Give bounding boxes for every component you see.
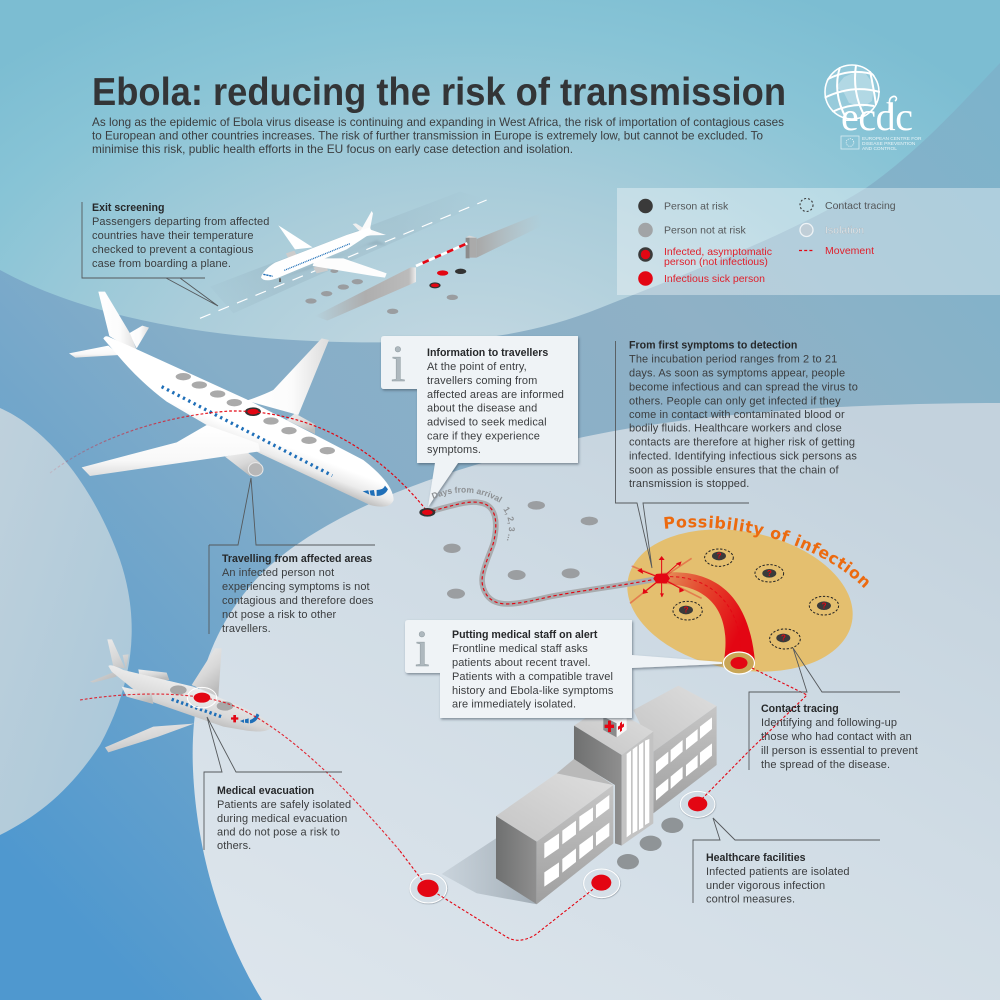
callout leader	[749, 648, 900, 770]
people at screening	[305, 269, 466, 314]
arrow: evacuation and ambulance path	[400, 851, 601, 940]
panel text: Putting medical staff on alert	[452, 629, 598, 641]
logo wordmark: ecdc	[841, 94, 913, 139]
contacts under tracing: ?	[717, 552, 722, 561]
seats	[176, 373, 335, 454]
callout: exit screening	[82, 202, 269, 306]
callout text: contagious and therefore does	[222, 595, 374, 607]
legend: isolation	[800, 224, 864, 236]
right wing	[633, 686, 717, 813]
central tower	[574, 705, 653, 846]
callout: contact tracing	[749, 648, 918, 771]
left wing	[496, 759, 613, 904]
panel text: travellers coming from	[427, 375, 537, 387]
panel text: symptoms.	[427, 444, 481, 456]
callout text: Medical evacuation	[217, 785, 314, 797]
callout leader	[616, 341, 749, 568]
legend: isolation: Isolation	[825, 224, 864, 236]
marker: isolated patient at zone	[724, 652, 754, 674]
scene: infection path	[419, 501, 839, 662]
legend: movement	[799, 245, 874, 257]
panel text: patients about recent travel.	[452, 657, 591, 669]
callout text	[217, 785, 351, 852]
people queue	[617, 818, 683, 869]
panel text: affected areas are informed	[427, 389, 564, 401]
callout text: soon as possible ensures that the chain of	[629, 464, 840, 476]
people not at risk	[443, 501, 598, 599]
evac lower engine	[122, 687, 153, 704]
callout text: Travelling from affected areas	[222, 553, 372, 565]
legend: infected asymptomatic: Infected, asymptomatic	[664, 246, 772, 258]
runway	[200, 192, 490, 318]
icon: globe	[824, 65, 880, 119]
callout text: others. People can only get infected if they	[629, 396, 841, 408]
airplane: medical evacuation	[90, 639, 272, 752]
callout text	[629, 340, 858, 490]
red infection tube	[657, 572, 755, 662]
panel: putting medical staff on alert	[405, 620, 722, 718]
callout leader	[204, 717, 342, 850]
evac details	[170, 685, 259, 723]
evac lower wing	[105, 718, 208, 752]
legend: infected asymptomatic: person (not infectious)	[664, 256, 768, 268]
contacts under tracing: ?	[684, 606, 689, 615]
callout leader	[693, 818, 880, 903]
label: days from arrival	[432, 486, 515, 540]
callout text	[92, 202, 269, 270]
callout text: The incubation period ranges from 2 to 21	[629, 354, 837, 366]
callout text: Exit screening	[92, 202, 164, 214]
panel text: about the disease and	[427, 402, 537, 414]
callout text: during medical evacuation	[217, 813, 347, 825]
callout text: contacts are therefore at higher risk of getting	[629, 436, 855, 448]
legend: movement: Movement	[825, 245, 874, 257]
legend: contact tracing: Contact tracing	[825, 200, 896, 212]
arrow: contact movement path	[697, 668, 807, 804]
legend: person at risk	[638, 199, 729, 213]
contacts under tracing	[673, 549, 839, 649]
callout text: and do not pose a risk to	[217, 826, 340, 838]
legend: person not at risk: Person not at risk	[664, 224, 746, 236]
hospital shadow	[442, 838, 537, 904]
logo caption: AND CONTROL	[862, 146, 897, 152]
red cross cube	[603, 709, 627, 737]
callout text: ill person is essential to prevent	[761, 745, 918, 757]
logo flag	[841, 136, 859, 149]
callout text: Healthcare facilities	[706, 852, 806, 864]
callout text: bodily fluids. Healthcare workers and close	[629, 422, 842, 434]
panel text: Patients with a compatible travel	[452, 671, 613, 683]
arrival marker	[419, 508, 435, 517]
evac fuselage	[108, 665, 272, 731]
callout text: From first symptoms to detection	[629, 340, 797, 352]
icon: info: i	[415, 621, 429, 678]
panel text: advised to seek medical	[427, 416, 547, 428]
callout text: Contact tracing	[761, 703, 839, 715]
intro text	[92, 115, 784, 156]
callout text: become infectious and can spread the virus to	[629, 382, 858, 394]
legend: person at risk: Person at risk	[664, 200, 729, 212]
circle: possibility of infection zone	[615, 511, 865, 690]
cockpit	[363, 486, 388, 496]
callout text: Passengers departing from affected	[92, 216, 269, 228]
window row	[162, 387, 332, 476]
airplane: large	[69, 292, 394, 507]
callout text	[222, 553, 374, 635]
callout text: travellers.	[222, 623, 271, 635]
title: Ebola: reducing the risk of transmission	[92, 71, 786, 114]
callout text: those who had contact with an	[761, 731, 912, 743]
callout text: Identifying and following-up	[761, 717, 897, 729]
evac upper wing	[192, 648, 222, 697]
panel: from first symptoms to detection	[616, 340, 858, 568]
arrow: medical evacuation flight path	[80, 694, 400, 851]
logo caption: EUROPEAN CENTRE FOR	[862, 136, 922, 142]
callout text: come in contact with contaminated blood or	[629, 409, 845, 421]
callout text: Patients are safely isolated	[217, 799, 351, 811]
legend: person not at risk	[638, 223, 746, 237]
evac tail	[90, 639, 129, 683]
callout text: others.	[217, 840, 251, 852]
label: possibility of infection: Possibility of infection	[664, 516, 869, 588]
callout: medical evacuation	[204, 717, 351, 852]
scene: runway and exit screening	[200, 192, 542, 321]
legend: contact tracing	[800, 198, 896, 212]
icon: info: i	[391, 336, 405, 393]
callout text: not pose a risk to other	[222, 609, 337, 621]
callout text	[706, 852, 850, 906]
callout text: An infected person not	[222, 567, 334, 579]
callout text: days. As soon as symptoms appear, people	[629, 368, 845, 380]
panel text: At the point of entry,	[427, 361, 527, 373]
fuselage	[103, 336, 394, 507]
isolated patient	[187, 687, 217, 708]
callout text: infected. Identifying infectious sick persons as	[629, 450, 857, 462]
callout text: checked to prevent a contagious	[92, 244, 254, 256]
isolated patients	[410, 791, 715, 903]
logo caption	[862, 136, 922, 152]
label: day numbers: 1, 2, 3 ...	[504, 506, 515, 540]
legend: infectious sick person: Infectious sick person	[664, 273, 765, 285]
scene: hospital	[410, 686, 717, 904]
intro text: to European and other countries increases. The risk of further transmission in Europe is extremely low, but cannot be excluded. To	[92, 128, 763, 142]
contacts under tracing: ?	[822, 601, 827, 610]
contacts under tracing: ?	[767, 569, 772, 578]
panel text: care if they experience	[427, 430, 540, 442]
upper wing	[247, 338, 329, 415]
callout text: the spread of the disease.	[761, 759, 890, 771]
panel: information to travellers	[381, 336, 578, 507]
callout text	[761, 703, 918, 771]
callout text: transmission is stopped.	[629, 478, 749, 490]
panel text	[427, 347, 564, 456]
callout text: Infected patients are isolated	[706, 866, 850, 878]
contacts under tracing: ?	[781, 634, 786, 643]
arrow: flight path to arrival	[50, 411, 427, 511]
tail	[69, 292, 149, 358]
panel text: history and Ebola-like symptoms	[452, 685, 614, 697]
legend: infected asymptomatic	[638, 246, 772, 268]
panel text: Frontline medical staff asks	[452, 643, 588, 655]
panel text: are immediately isolated.	[452, 698, 576, 710]
legend: infectious sick person	[638, 271, 765, 286]
barrier wall	[315, 213, 542, 321]
label: days from arrival: Days from arrival	[432, 486, 502, 502]
callout: travelling from affected areas	[209, 478, 375, 635]
intro text: minimise this risk, public health efforts in the EU focus on early case detection and isolation.	[92, 142, 573, 156]
callout text: experiencing symptoms is not	[222, 581, 370, 593]
engines	[225, 413, 315, 476]
intro text: As long as the epidemic of Ebola virus disease is continuing and expanding in West Africa, the risk of importation of contagious cases	[92, 115, 784, 129]
lower wing	[82, 425, 260, 476]
infected passenger	[245, 407, 261, 416]
panel text: Information to travellers	[427, 347, 548, 359]
callout: healthcare facilities	[693, 818, 880, 906]
evac upper engine	[138, 669, 169, 680]
callout text: countries have their temperature	[92, 230, 254, 242]
panel text	[452, 629, 614, 710]
callout text: case from boarding a plane.	[92, 258, 231, 270]
callout leader	[82, 202, 218, 306]
airplane on runway	[261, 211, 387, 282]
logo: ECDC	[824, 65, 922, 152]
callout text: under vigorous infection	[706, 880, 825, 892]
callout text: control measures.	[706, 894, 795, 906]
logo caption: DISEASE PREVENTION	[862, 141, 916, 147]
burst	[630, 556, 702, 603]
callout leader	[209, 478, 375, 634]
timeline path	[427, 502, 660, 604]
panel: legend	[617, 188, 1000, 295]
barrier pole	[416, 243, 467, 266]
